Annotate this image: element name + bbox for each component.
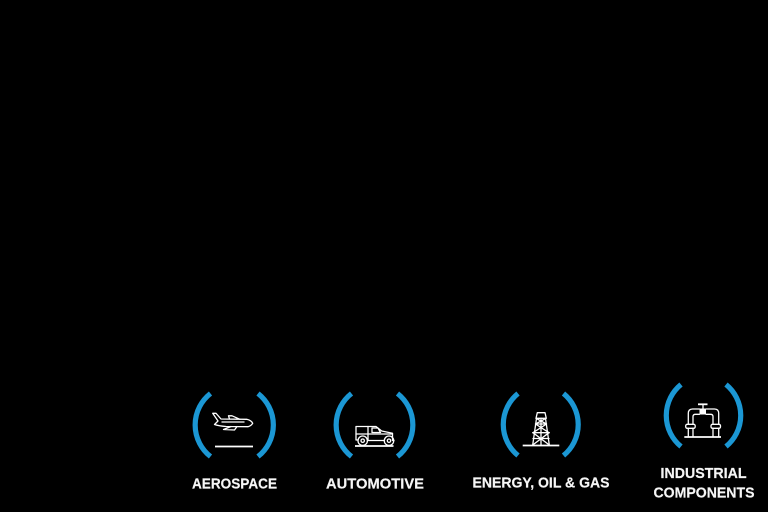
- bracket ring: automotive: [336, 394, 413, 456]
- sector: automotive: [326, 394, 424, 493]
- bracket ring: aerospace: [195, 394, 273, 456]
- label: industrial components: COMPONENTS: [654, 485, 754, 502]
- icon: off-road vehicle: [355, 426, 394, 446]
- sector: energy, oil and gas: [472, 394, 610, 492]
- label: aerospace: AEROSPACE: [192, 476, 277, 493]
- label: energy, oil and gas: ENERGY, OIL & GAS: [472, 475, 610, 492]
- sector: aerospace: [192, 394, 277, 493]
- sector: industrial components: [654, 384, 754, 502]
- icon: pipes and valve: [684, 404, 721, 437]
- label: automotive: AUTOMOTIVE: [326, 476, 424, 493]
- label: industrial components: INDUSTRIAL: [660, 465, 746, 482]
- icon: airplane over runway: [213, 413, 253, 446]
- label: industrial components: [654, 465, 754, 502]
- bracket ring: energy: [503, 394, 578, 456]
- icon: oil derrick: [523, 413, 559, 446]
- bracket ring: industrial: [666, 384, 741, 446]
